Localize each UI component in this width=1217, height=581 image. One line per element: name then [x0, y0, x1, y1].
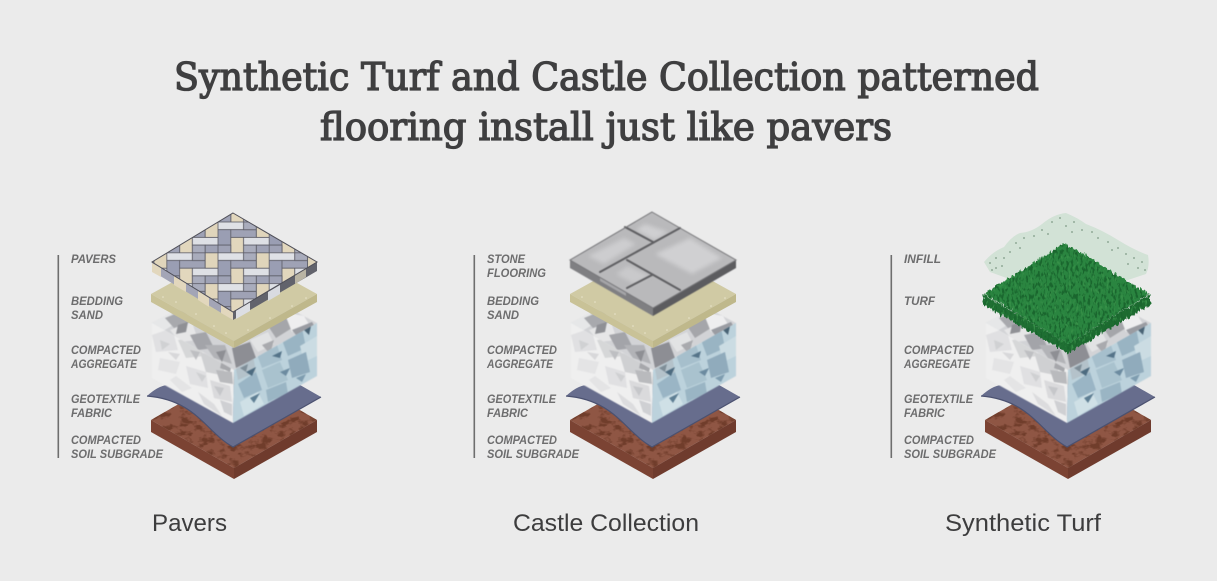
layer labels: TURF [904, 294, 936, 308]
layer: geotextile fabric [147, 385, 321, 447]
layer: geotextile fabric [566, 385, 740, 447]
layer labels: AGGREGATE [70, 357, 138, 371]
layer labels [70, 252, 164, 461]
layer labels: SAND [71, 308, 103, 322]
layer labels: COMPACTED [904, 343, 974, 357]
title: Synthetic Turf and Castle Collection patterned [174, 55, 1039, 99]
layer labels: FLOORING [487, 266, 546, 280]
layer labels: SOIL SUBGRADE [71, 447, 164, 461]
layer: compacted aggregate [152, 280, 317, 423]
layer labels: FABRIC [904, 406, 945, 420]
caption: Pavers [152, 510, 227, 537]
layer labels: COMPACTED [487, 433, 557, 447]
layer labels: AGGREGATE [903, 357, 971, 371]
panel: castle collection [474, 212, 740, 537]
layer: turf [983, 243, 1150, 353]
legend rule [474, 255, 475, 458]
layer: compacted aggregate [986, 280, 1151, 423]
layer: geotextile fabric [981, 385, 1155, 447]
title [174, 55, 1039, 149]
title: flooring install just like pavers [320, 105, 892, 149]
layer labels: BEDDING [487, 294, 539, 308]
layer labels: SOIL SUBGRADE [904, 447, 997, 461]
legend rule [58, 255, 59, 458]
caption: Castle Collection [513, 510, 699, 537]
layer labels: COMPACTED [71, 433, 141, 447]
layer labels: COMPACTED [487, 343, 557, 357]
layer: infill [984, 213, 1149, 300]
layer labels: STONE [487, 252, 526, 266]
layer labels: COMPACTED [904, 433, 974, 447]
layer labels: SOIL SUBGRADE [487, 447, 580, 461]
layer: compacted soil [151, 372, 317, 479]
caption: Synthetic Turf [945, 510, 1101, 537]
layer: bedding sand [151, 248, 317, 348]
layer: stone flooring [570, 212, 736, 316]
layer labels [486, 252, 580, 461]
layer labels: BEDDING [71, 294, 123, 308]
layer: herringbone pavers [152, 213, 317, 320]
layer: compacted aggregate [571, 280, 736, 423]
layer labels: GEOTEXTILE [487, 392, 557, 406]
layer labels: INFILL [904, 252, 941, 266]
layer labels: GEOTEXTILE [71, 392, 141, 406]
layer: bedding sand [570, 248, 736, 348]
layer labels [903, 252, 997, 461]
layer labels: COMPACTED [71, 343, 141, 357]
panel: synthetic turf [890, 213, 1155, 537]
layer: compacted soil [570, 372, 736, 479]
layer labels: FABRIC [487, 406, 528, 420]
layer labels: SAND [487, 308, 519, 322]
layer labels: PAVERS [71, 252, 116, 266]
legend rule [890, 255, 892, 458]
layer labels: FABRIC [71, 406, 112, 420]
layer labels: AGGREGATE [486, 357, 554, 371]
layer labels: GEOTEXTILE [904, 392, 974, 406]
panel: pavers [58, 213, 321, 537]
layer: compacted soil [985, 372, 1151, 479]
